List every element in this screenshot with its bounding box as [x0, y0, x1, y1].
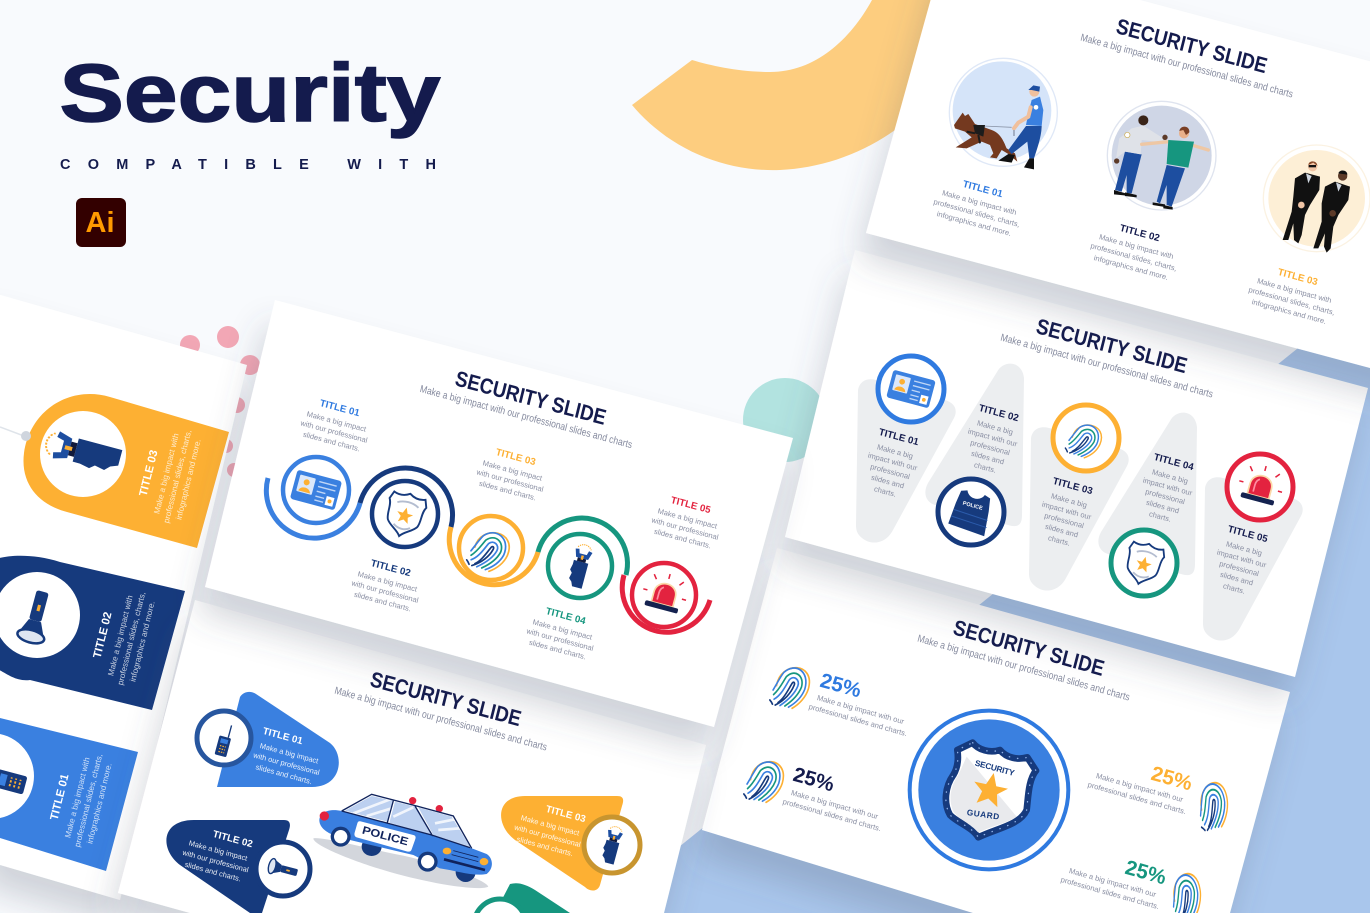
caption 03: with our professional [475, 467, 545, 494]
tag 01 blue [0, 718, 138, 871]
caption 02 [347, 554, 426, 615]
heading: Make a big impact with our professional slides and charts [916, 634, 1131, 704]
tag: title 03 [501, 796, 640, 891]
tag: title 02 [166, 820, 310, 913]
wave line [266, 468, 710, 632]
caption 05: with our professional [650, 515, 720, 542]
caption 01 [930, 173, 1027, 240]
pink dots decoration [180, 326, 260, 477]
item 05 [1209, 454, 1293, 600]
tag: title 01 [197, 692, 339, 788]
caption 01: slides and charts. [302, 430, 361, 453]
tag 03 orange: TITLE 03 [138, 449, 160, 498]
panel: top right slide, security people [866, 0, 1370, 384]
caption 04: with our professional [525, 626, 595, 653]
item 02: impact with our [967, 427, 1019, 449]
caption 02: professional slides, charts, [1090, 241, 1178, 273]
item 03 [1034, 405, 1119, 552]
item 01: slides and [870, 473, 905, 490]
caption 05: slides and charts. [653, 527, 712, 550]
caption 03: professional slides, charts, [1248, 285, 1336, 317]
heading [999, 305, 1221, 401]
heading: Make a big impact with our professional slides and charts [333, 686, 548, 754]
heading [333, 658, 555, 754]
item 04: Make a big [1151, 467, 1189, 486]
tag 01 blue: Make a big impact with [63, 756, 92, 839]
item 02 [938, 402, 1025, 545]
stat: bottom left: Make a big impact with our [790, 788, 880, 821]
heading [1079, 5, 1301, 101]
caption 02: TITLE 02 [1119, 223, 1161, 244]
illustration: police car: POLICE [361, 825, 410, 848]
stat: top right: professional slides and charts. [1087, 780, 1187, 816]
tag: title 04, partly cropped [474, 883, 570, 913]
item 01: charts. [873, 484, 897, 499]
tag 03 orange: Make a big impact with [152, 432, 181, 515]
item 05: TITLE 05 [1227, 524, 1269, 545]
item 03: slides and [1044, 522, 1079, 539]
step 3 ring and icon [459, 516, 523, 580]
caption 01: TITLE 01 [319, 398, 361, 419]
caption 03: slides and charts. [478, 479, 537, 502]
caption 03: Make a big impact with [1256, 276, 1333, 305]
caption 01: with our professional [299, 418, 369, 445]
stat: top left [769, 663, 911, 738]
item 03: impact with our [1041, 500, 1093, 522]
caption 02: slides and charts. [353, 590, 412, 613]
caption 03 [1245, 261, 1342, 328]
stat: top left: Make a big impact with our [816, 693, 906, 726]
heading [916, 606, 1138, 704]
central security guard badge [910, 711, 1068, 869]
caption 02 [1087, 217, 1184, 284]
connector line and dot [0, 427, 31, 441]
caption 01: Make a big impact [306, 409, 368, 434]
caption 03 [472, 443, 551, 504]
heading [419, 357, 640, 451]
heading: Make a big impact with our professional slides and charts [1079, 33, 1294, 101]
icon: Adobe Illustrator [76, 198, 126, 247]
tag: title 02: with our professional [180, 848, 250, 874]
caption 02: Make a big impact [357, 569, 419, 594]
caption 02: Make a big impact with [1098, 232, 1175, 261]
illustration: police car [313, 794, 492, 888]
item 05: Make a big [1225, 539, 1263, 558]
item 04: charts. [1148, 509, 1172, 524]
item 04 [1111, 451, 1200, 596]
item 05: slides and [1219, 570, 1254, 587]
step 4 ring and icon [548, 534, 612, 598]
caption 02: TITLE 02 [370, 558, 412, 579]
step 2 ring and icon [372, 481, 438, 547]
caption 01 [296, 394, 375, 455]
caption 03: TITLE 03 [495, 447, 537, 468]
teal circle decoration [743, 378, 827, 462]
caption 04: Make a big impact [532, 617, 594, 642]
caption 02: with our professional [350, 578, 420, 605]
caption 03: infographics and more. [1251, 297, 1327, 326]
heading: SECURITY SLIDE [951, 615, 1107, 681]
caption 02: infographics and more. [1093, 253, 1169, 282]
tag 02 navy: infographics and more. [128, 600, 157, 683]
caption 05: Make a big impact [657, 506, 719, 531]
heading: SECURITY SLIDE [453, 366, 609, 430]
caption 04: slides and charts. [528, 638, 587, 661]
item 02: TITLE 02 [978, 403, 1020, 424]
step 1 ring and icon [283, 457, 349, 523]
stat: bottom right: 25% [1123, 856, 1169, 889]
caption 04 [522, 602, 601, 663]
item 01: professional [869, 462, 911, 481]
tag 03 orange [23, 394, 229, 548]
orange arc decoration [632, 0, 935, 170]
item 01 [860, 356, 944, 503]
tag: title 03: with our professional [512, 822, 582, 849]
item 02: professional [969, 438, 1011, 457]
caption 05: TITLE 05 [670, 495, 712, 516]
illustration: officer with dog [949, 58, 1057, 169]
item 01: Make a big [876, 442, 914, 461]
caption 01: TITLE 01 [962, 179, 1004, 200]
main title: Security [60, 48, 441, 139]
item 02: Make a big [976, 418, 1014, 437]
panel: middle right slide, five drop shapes [785, 250, 1368, 677]
item 02: charts. [973, 460, 997, 475]
tag: title 02: Make a big impact [188, 838, 248, 863]
panel: left slide, vertical tags [0, 292, 247, 900]
item 03: professional [1043, 511, 1085, 530]
grey drop shapes [856, 364, 1303, 641]
tag 02 navy: TITLE 02 [92, 611, 114, 660]
tag 01 blue: TITLE 01 [49, 773, 71, 822]
panel: bottom right slide, fingerprint statistics [702, 548, 1290, 913]
stat: top right [1087, 762, 1230, 831]
item 05: charts. [1222, 581, 1246, 596]
item 04: impact with our [1142, 476, 1194, 498]
stat: bottom left [743, 757, 885, 833]
stat: top left: 25% [818, 669, 864, 702]
tag: title 01: with our professional [251, 750, 321, 777]
panel: centre slide, five step wave process [205, 300, 793, 727]
stat: bottom right: professional slides and charts. [1060, 875, 1160, 911]
heading: SECURITY SLIDE [368, 666, 524, 731]
caption 04: TITLE 04 [545, 606, 587, 627]
item 01: impact with our [867, 451, 919, 473]
item 03: TITLE 03 [1052, 476, 1094, 497]
item 03: charts. [1047, 533, 1071, 548]
caption 01: infographics and more. [936, 209, 1012, 238]
stat: bottom right [1060, 856, 1203, 913]
tag 01 blue: infographics and more. [85, 762, 114, 845]
item 03: Make a big [1050, 491, 1088, 510]
item 04: slides and [1145, 498, 1180, 515]
caption 01: Make a big impact with [941, 188, 1018, 217]
item 05: impact with our [1216, 548, 1268, 570]
tag: title 02: TITLE 02 [212, 829, 254, 850]
item 04: TITLE 04 [1153, 452, 1195, 473]
item 02: slides and [970, 449, 1005, 466]
heading: SECURITY SLIDE [1034, 313, 1190, 378]
heading: Make a big impact with our professional slides and charts [999, 333, 1214, 401]
caption 05 [647, 491, 726, 552]
illustration: body search [1107, 101, 1216, 210]
caption 03: TITLE 03 [1277, 267, 1319, 288]
tag: title 02: slides and charts. [184, 860, 242, 884]
stat: bottom left: 25% [791, 763, 837, 796]
tag: title 01: Make a big impact [259, 741, 319, 766]
stat: top right: 25% [1149, 762, 1195, 795]
tag: title 01: TITLE 01 [262, 726, 304, 747]
stat: top left: professional slides and charts. [808, 702, 908, 738]
blue background shape [597, 290, 1370, 913]
tag: title 03: slides and charts. [516, 834, 574, 858]
step 5 ring and icon [632, 563, 696, 627]
tag 02 navy: Make a big impact with [106, 594, 135, 677]
item 05: professional [1218, 559, 1260, 578]
caption 01: professional slides, charts, [933, 197, 1021, 229]
central security guard badge: SECURITY [974, 758, 1016, 778]
heading: Make a big impact with our professional slides and charts [419, 384, 633, 451]
central security guard badge: GUARD [966, 807, 1000, 822]
item 01: TITLE 01 [878, 427, 920, 448]
icon: Adobe Illustrator: Ai [86, 207, 114, 239]
tag 02 navy [0, 556, 185, 710]
tag: title 03: TITLE 03 [545, 804, 587, 825]
tag: title 01: slides and charts. [255, 762, 313, 786]
stat: bottom left: professional slides and charts. [782, 797, 882, 833]
tag: title 03: Make a big impact [520, 813, 580, 838]
stat: top right: Make a big impact with our [1095, 771, 1185, 804]
heading: SECURITY SLIDE [1114, 13, 1270, 78]
tag 03 orange: professional slides, charts, [162, 429, 193, 524]
subtitle: compatible with: COMPATIBLE WITH [60, 157, 436, 173]
item 04: professional [1144, 487, 1186, 506]
panel: bottom centre slide, police car [118, 600, 706, 913]
illustration: two bodyguards [1263, 145, 1370, 253]
stat: bottom right: Make a big impact with our [1068, 866, 1158, 899]
tag 03 orange: infographics and more. [174, 438, 203, 521]
caption 03: Make a big impact [482, 458, 544, 483]
tag 02 navy: professional slides, charts, [116, 591, 147, 686]
tag 01 blue: professional slides, charts, [73, 753, 104, 848]
